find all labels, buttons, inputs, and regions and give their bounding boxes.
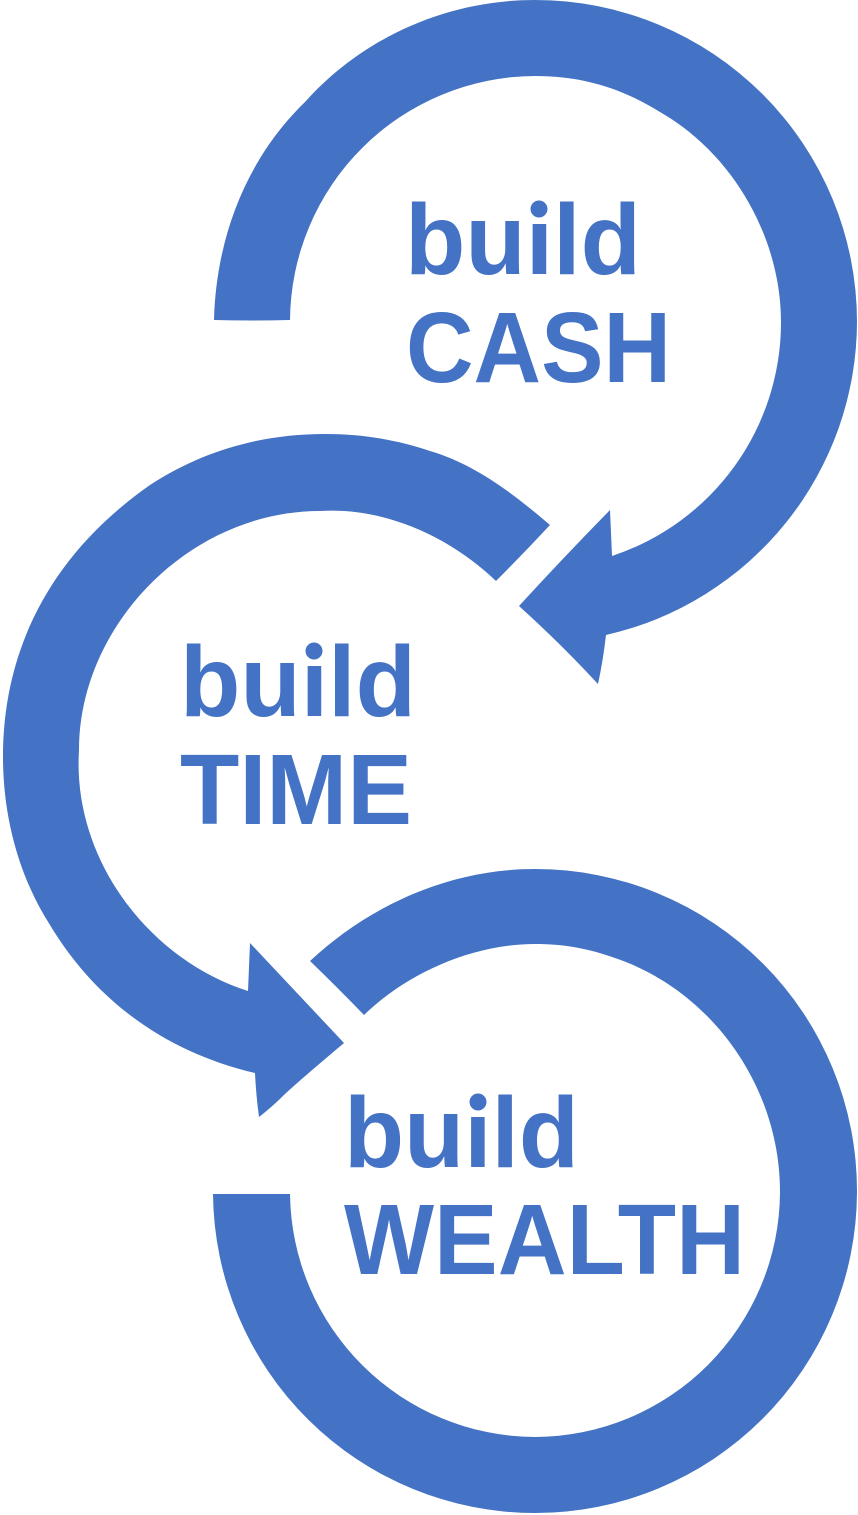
arrow: middle circular arrow xyxy=(3,434,550,1117)
text: build time: TIME xyxy=(180,734,412,846)
text: build cash: CASH xyxy=(406,292,671,404)
text: build time: build xyxy=(180,626,416,738)
text: build wealth xyxy=(344,1077,745,1296)
text: build wealth: build xyxy=(344,1077,579,1189)
arrow: bottom circular arc xyxy=(213,869,857,1513)
text: build cash xyxy=(405,184,671,404)
arrow: top circular arrow xyxy=(214,0,857,684)
text: build time xyxy=(180,626,416,846)
text: build wealth: WEALTH xyxy=(344,1184,745,1296)
text: build cash: build xyxy=(405,184,641,296)
